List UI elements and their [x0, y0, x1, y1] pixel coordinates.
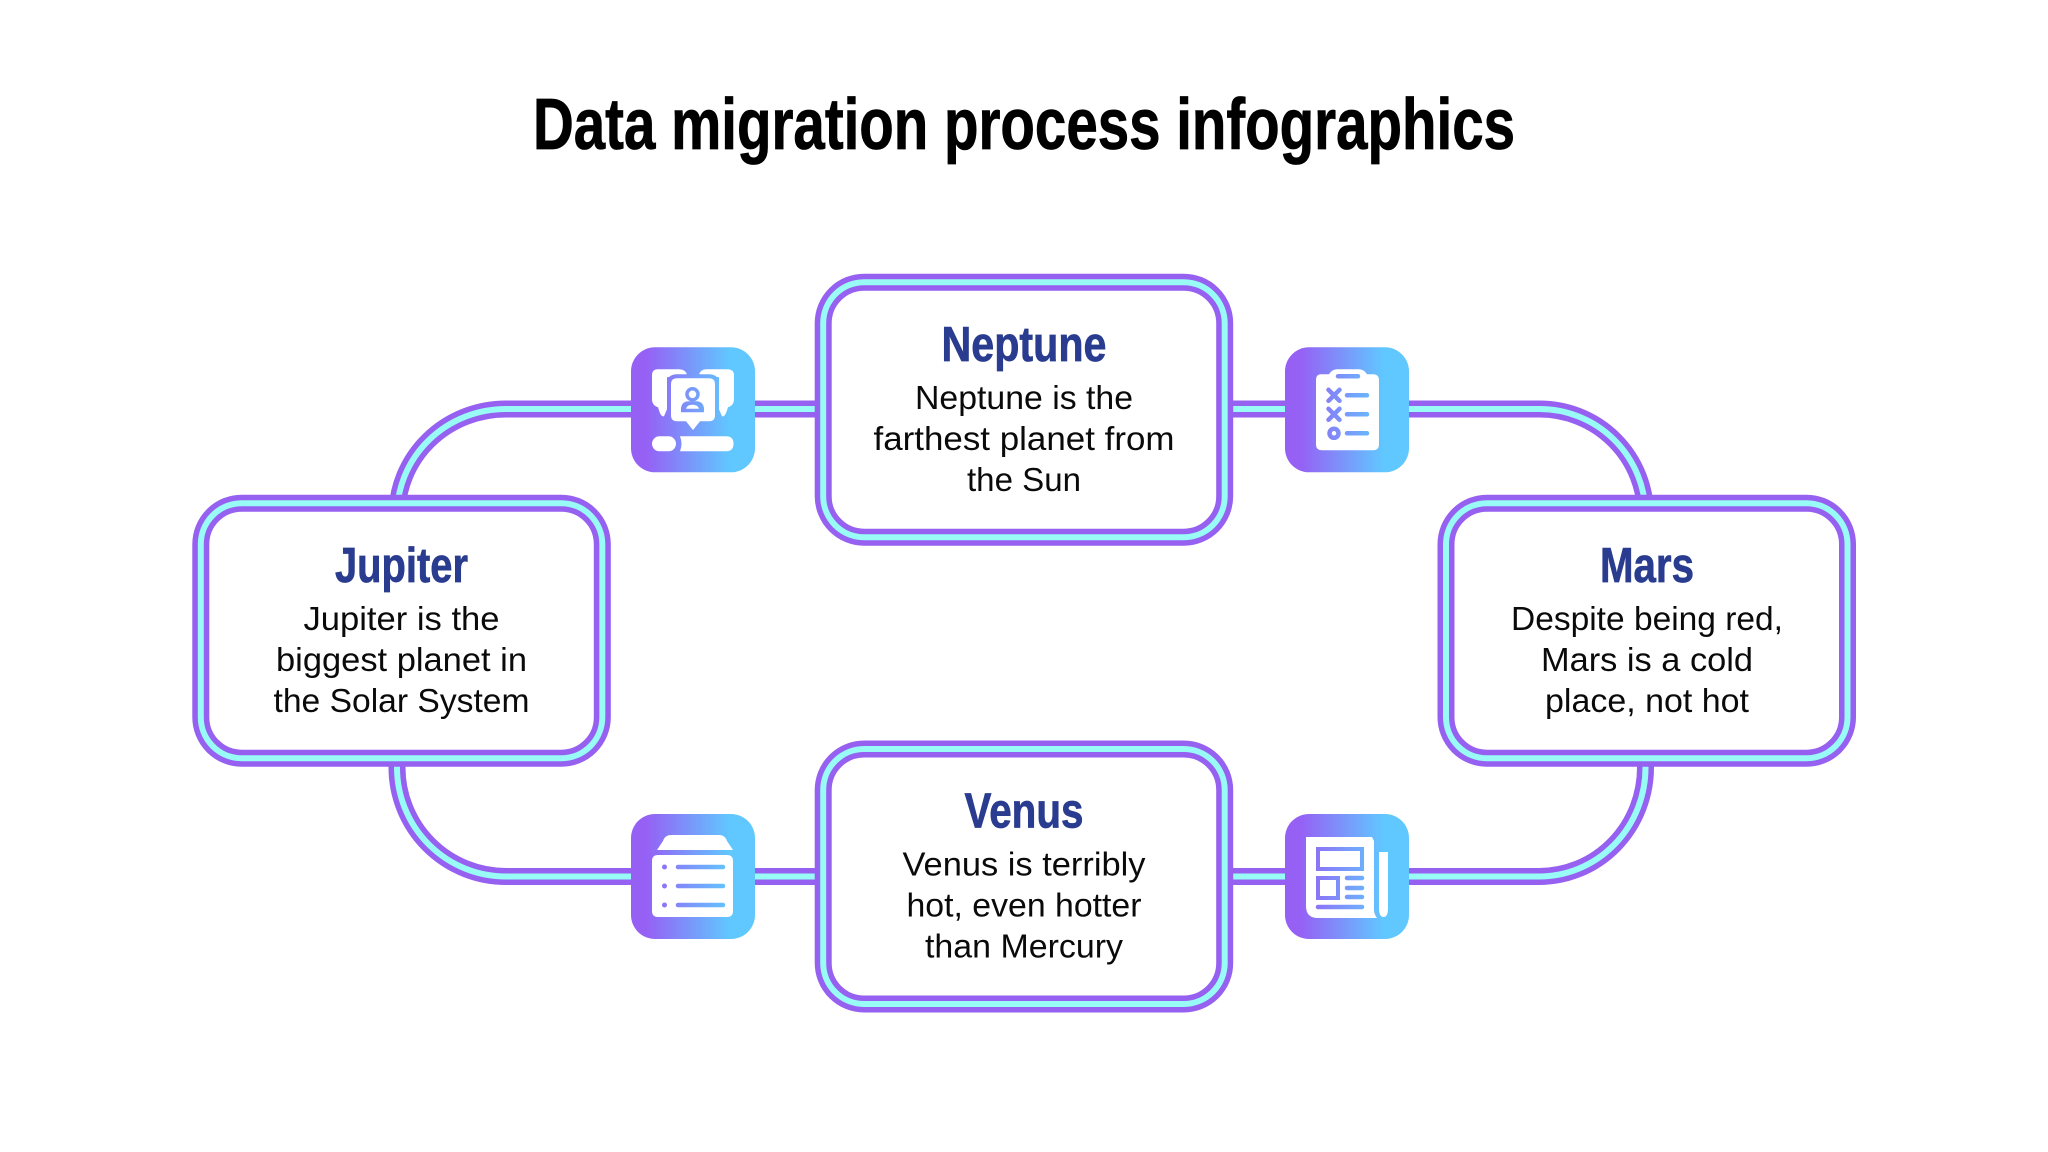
- panel: Neptune: [823, 282, 1225, 537]
- text: Jupiter description: biggest planet in: [276, 641, 527, 678]
- icon: chat bubbles with user: [631, 347, 755, 472]
- panel: Venus: [823, 749, 1225, 1004]
- heading: Mars: Mars: [1600, 539, 1694, 593]
- text: Neptune description: farthest planet from: [874, 420, 1174, 457]
- panel: Mars: [1446, 503, 1848, 758]
- icon: clipboard checklist: [1285, 347, 1409, 472]
- text: Venus description: [902, 846, 1146, 964]
- text: Venus description: hot, even hotter: [906, 886, 1142, 924]
- connector: Jupiter to Neptune: [397, 409, 830, 520]
- connector: Jupiter to Venus: [397, 740, 830, 876]
- icon: newspaper: [1285, 814, 1409, 939]
- text: Jupiter description: [274, 600, 530, 719]
- text: Mars description: Despite being red,: [1511, 600, 1783, 637]
- text: Mars description: Mars is a cold: [1541, 641, 1753, 678]
- text: Neptune description: the Sun: [967, 461, 1081, 498]
- heading: Neptune: Neptune: [942, 318, 1106, 372]
- text: Jupiter description: Jupiter is the: [304, 600, 500, 637]
- heading: Venus: Venus: [964, 784, 1084, 838]
- text: Mars description: place, not hot: [1545, 682, 1749, 719]
- connector: Venus to Mars: [1220, 740, 1646, 876]
- icon: server database: [631, 814, 755, 939]
- text: Neptune description: Neptune is the: [915, 379, 1133, 416]
- text: Mars description: [1511, 600, 1783, 719]
- text: Venus description: than Mercury: [925, 928, 1124, 964]
- panel: Jupiter: [201, 503, 602, 758]
- text: Jupiter description: the Solar System: [274, 682, 530, 719]
- text: Neptune description: [874, 379, 1174, 498]
- heading: Jupiter: Jupiter: [335, 539, 468, 593]
- title: Data migration process infographics: [533, 85, 1515, 165]
- connector: Neptune to Mars: [1220, 409, 1646, 520]
- text: Venus description: Venus is terribly: [902, 846, 1146, 882]
